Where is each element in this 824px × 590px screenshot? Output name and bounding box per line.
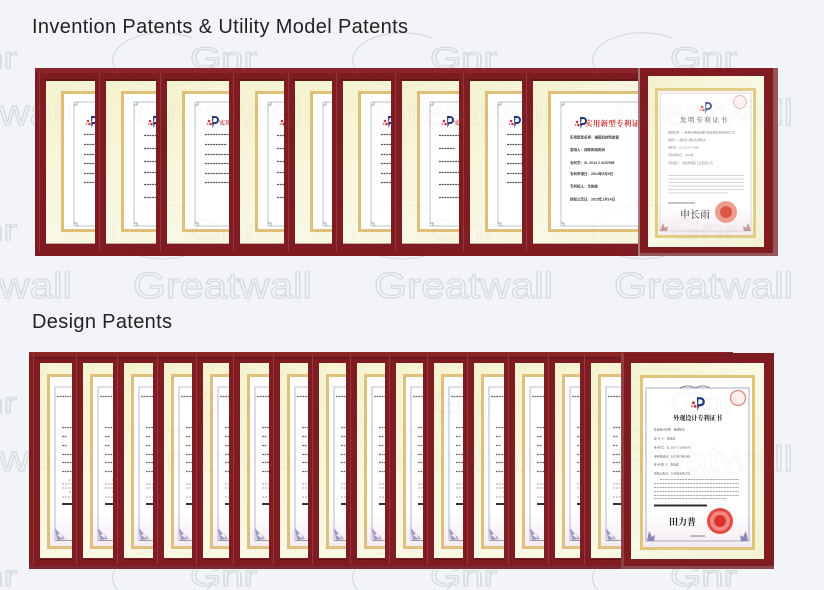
- certificate title: 外观设计专利证书: [673, 413, 723, 422]
- watermark: repeated Greatwall logo pattern: Greatwall: [374, 265, 553, 306]
- certificate paragraph lines: [668, 175, 744, 193]
- design frame 5: [192, 352, 345, 569]
- certificate details: 授权公告日：2008年8月27日: [654, 472, 690, 476]
- certificate details: 发明人：胡陈陈 胡陈凤 胡陈文: [668, 138, 706, 142]
- design frame 9: [346, 352, 499, 569]
- watermark: repeated Greatwall logo pattern: Gnr: [430, 42, 497, 75]
- certificate frame 8: [459, 68, 609, 256]
- design frame 13: [504, 352, 657, 569]
- side edge of frame: [772, 68, 778, 256]
- heading: invention and utility model patents: Invention Patents & Utility Model Patents: [32, 16, 408, 38]
- certificate frame 7: [391, 68, 541, 256]
- certificate frame 2: [95, 68, 245, 256]
- design frame 11: [423, 352, 576, 569]
- certificate frame 6: [332, 68, 482, 256]
- wooden frame: [621, 353, 774, 569]
- watermark: repeated Greatwall logo pattern: Greatwall: [374, 438, 553, 479]
- certificate logo: [700, 102, 712, 114]
- watermark: repeated Greatwall logo pattern: Greatwall: [614, 92, 793, 133]
- row of invention and utility model certificates: [35, 68, 778, 256]
- signature: 田力普: [669, 516, 696, 527]
- red seal: [715, 201, 737, 223]
- certificate details: [654, 428, 691, 476]
- row of design patent certificates: [29, 352, 774, 569]
- signature: 申长雨: [680, 208, 710, 221]
- wooden frame: [638, 68, 773, 256]
- certificate details: 专 利 权 人：张清波: [654, 462, 679, 466]
- black bar: [654, 504, 707, 506]
- certificate details: 专利号：ZL 2013 1 0465: [668, 146, 699, 150]
- certificate paragraph lines: [654, 480, 739, 498]
- watermark: repeated Greatwall logo pattern: Greatwall: [133, 438, 312, 479]
- stamp: [730, 390, 746, 406]
- certificate frame 1: [35, 68, 185, 256]
- red seal: [707, 508, 733, 534]
- watermark: repeated Greatwall logo pattern: Gnr: [670, 214, 737, 247]
- design frame 4: [153, 352, 306, 569]
- watermark: repeated Greatwall logo pattern: Greatwall: [374, 92, 553, 133]
- design frame 15: [580, 352, 733, 569]
- certificate details: 专利号：ZL 2014 2 0237859: [570, 160, 615, 165]
- watermark: repeated Greatwall logo pattern: Gnr: [670, 387, 737, 420]
- cream mat: [631, 363, 764, 559]
- certificate frame 9: utility model certificate: [522, 68, 672, 256]
- certificate details: 设 计 人：张清波: [654, 436, 675, 440]
- front design patent certificate: [621, 353, 774, 569]
- certificate frame 4: [229, 68, 379, 256]
- corner ornaments: [660, 223, 751, 231]
- certificate details: 发明名称：一种用于锂电池极片的涂膜装置及制作工艺: [668, 130, 735, 134]
- design frame 12: [463, 352, 616, 569]
- certificate details: 发明人：胡陈陈胡陈凤: [570, 147, 605, 152]
- corner ornaments: [647, 531, 748, 541]
- certificate details: 专利申请日：2007年7月19日: [654, 454, 690, 458]
- certificate details: 外观设计名称：电源插头: [654, 428, 685, 432]
- certificate frame 3: 实用新型专利证书: [219, 119, 268, 127]
- watermark: repeated Greatwall logo pattern: Gnr: [430, 387, 497, 420]
- watermark: repeated Greatwall logo pattern: Gnr: [190, 387, 257, 420]
- certificate logo: [691, 397, 705, 411]
- top ornament: [680, 386, 710, 388]
- certificate title: 发明专利证书: [680, 115, 728, 124]
- certificate details: 专 利 号：ZL 2007 3 0169073: [654, 446, 691, 450]
- design frame 8: [308, 352, 461, 569]
- certificate details: 授权公告日：2015年1月14日: [570, 196, 615, 202]
- design frame 2: [72, 352, 225, 569]
- watermark: repeated Greatwall logo pattern: Gnr: [430, 214, 497, 247]
- certificate details: 专利申请日：2013年: [668, 153, 694, 157]
- watermark: repeated Greatwall logo pattern: Gnr: [190, 42, 257, 75]
- design frame 10: [385, 352, 538, 569]
- design frame 7: [269, 352, 422, 569]
- watermark: repeated Greatwall logo pattern: Gnr: [190, 214, 257, 247]
- design frame 6: [229, 352, 382, 569]
- certificate frame 5: [284, 68, 434, 256]
- watermark: repeated Greatwall logo pattern: Greatwall: [133, 265, 312, 306]
- stamp: [734, 96, 746, 108]
- certificate details: 实用新型名称：描膜机控制装置: [570, 134, 619, 140]
- design frame 14: [544, 352, 697, 569]
- certificate frame 7: 实用新型: [454, 119, 478, 127]
- design frame 3: [113, 352, 266, 569]
- watermark: repeated Greatwall logo pattern: Greatwall: [614, 265, 793, 306]
- certificate frame 3: [156, 68, 306, 256]
- certificate details: 专利申请日：2014年5月9日: [570, 171, 613, 176]
- certificate details: [570, 134, 619, 202]
- certificate details: 专利权人：华陈陈: [570, 184, 598, 188]
- certificate title: 实用新型专利证书: [585, 118, 648, 128]
- watermark: repeated Greatwall logo pattern: Greatwall: [614, 438, 793, 479]
- front certificate frame: invention patent: [638, 68, 778, 256]
- cream mat: [648, 76, 764, 247]
- design frame 1: [29, 352, 182, 569]
- certificate details: 专利权人：深圳市陈陈工业有限公司: [668, 161, 713, 165]
- heading: design patents: Design Patents: [32, 311, 172, 333]
- date text: [690, 536, 705, 537]
- watermark: repeated Greatwall logo pattern: Gnr: [670, 42, 737, 75]
- watermark: repeated Greatwall logo pattern: Greatwall: [133, 92, 312, 133]
- certificate details: [668, 130, 735, 165]
